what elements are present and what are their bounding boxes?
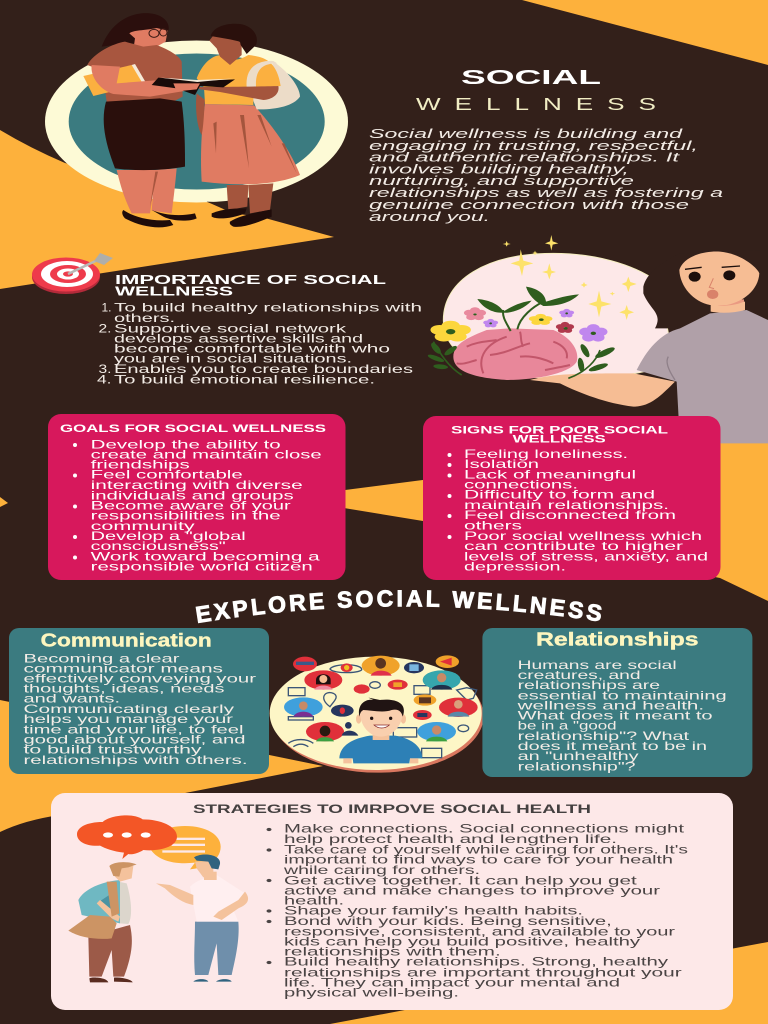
bullet list: signs: Feeling loneliness. [464,447,628,461]
intro paragraph [369,127,723,224]
intro paragraph: nurturing, and supportive [369,174,634,188]
numbered list: importance: To build healthy relationships with [114,301,422,315]
bullet list: signs: levels of stress, anxiety, and [464,549,708,563]
bullet list: signs: Poor social wellness which [464,529,702,543]
text: relationships body: relationships are [518,678,661,692]
bullet list: strategies: Get active together. It can help you get [284,873,638,887]
numbered list: importance: Supportive social network [114,321,348,335]
text: relationships body: creatures, and [518,668,641,682]
heading: importance of social wellness [115,273,387,299]
heading: communication: Communication [41,631,212,651]
bullet list: goals: Develop a "global [91,529,246,543]
bullet list: strategies: health. [284,893,344,907]
text: relationships body: an "unhealthy [518,749,639,763]
bullet list: strategies: while caring for others. [282,863,480,877]
intro paragraph: around you. [369,210,490,224]
bullet list: signs: can contribute to higher [464,539,683,553]
numbered list: importance: 4. [97,372,112,386]
text: communication body [24,651,256,767]
bullet list: strategies: active and make changes to improve your [284,883,660,897]
heading: signs: WELLNESS [513,434,606,446]
text: communication body: good about yourself, and [24,733,246,747]
bullet list: strategies: important to find ways to care for your health [284,853,673,867]
bullet list: strategies [266,822,688,1000]
numbered list: importance: To build emotional resilience. [114,372,375,386]
numbered list: importance: 3. [98,362,112,376]
bullet list: goals: Become aware of your [91,499,291,513]
text: relationships body: be in a "good [518,719,617,733]
bullet list: goals: Work toward becoming a [91,550,320,564]
text: communication body: time and your life, to feel [24,722,244,736]
bullet list: goals [73,437,322,574]
bullet list: strategies: Make connections. Social connections might [284,822,685,836]
bullet list: signs: Lack of meaningful [464,467,636,481]
intro paragraph: involves building healthy, [369,162,629,176]
title: WELLNESS [416,94,656,114]
heading: explore social wellness (curved): EXPLORE SOCIAL WELLNESS [196,590,602,624]
bullet list: strategies: Build healthy relationships. Strong, healthy [284,955,668,969]
intro paragraph: genuine connection with those [369,198,689,212]
intro paragraph: relationships as well as fostering a [369,186,723,200]
panel: goals for social wellness [48,414,346,580]
panel: signs for poor social wellness [423,416,720,580]
bullet list: strategies: responsive, consistent, and available to your [284,924,675,938]
numbered list: importance: others. [114,311,175,325]
numbered list: importance [97,301,422,386]
bullet list: signs: connections. [464,478,578,492]
bullet list: goals: create and maintain close [91,447,322,461]
bullet list: signs: Feel disconnected from [464,508,676,522]
numbered list: importance: Enables you to create boundaries [114,362,413,376]
bullet list: strategies: Bond with your kids. Being sensitive, [284,914,612,928]
intro paragraph: Social wellness is building and [369,127,684,141]
bullet list: goals: Develop the ability to [91,437,281,451]
heading: importance of social wellness: WELLNESS [115,285,233,299]
numbered list: importance: become comfortable with who [114,342,391,356]
numbered list: importance: 2. [98,321,112,335]
bullet list: strategies: Take care of yourself while caring for others. It's [284,842,688,856]
title: SOCIAL [461,67,601,89]
text: relationships body: does it meant to be in [518,739,707,753]
illustration: two women reading a book [45,13,348,227]
illustration: two people talking with speech bubbles [68,815,248,982]
bullet list: goals: individuals and groups [91,488,294,502]
bullet list: goals: consciousness" [91,539,226,553]
bullet list: strategies: life. They can impact your mental and [284,976,620,990]
heading: relationships: Relationships [536,630,698,650]
intro paragraph: engaging in trusting, respectful, [369,139,698,153]
intro paragraph: and authentic relationships. It [369,150,680,164]
text: communication body: to build trustworthy [24,743,202,757]
text: communication body: and wants. [24,692,120,706]
text: relationships body: essential to maintaining [518,688,727,702]
heading: strategies: STRATEGIES TO IMRPOVE SOCIAL HEALTH [193,802,591,816]
text: communication body: thoughts, ideas, needs [24,682,224,696]
bullet list: signs: Difficulty to form and [464,488,655,502]
bullet list: strategies: relationships are important throughout your [284,965,682,979]
bullet list: goals: interacting with diverse [91,478,303,492]
illustration: woman holding brain with flowers [427,235,768,443]
text: communication body: helps you manage your [24,712,233,726]
bullet list: goals: responsible world citizen [91,560,313,574]
text: relationships body [516,658,727,773]
numbered list: importance: develops assertive skills and [114,332,363,346]
bullet list: signs: others [464,518,522,532]
bullet list: strategies: kids can help you build positive, healthy [284,934,640,948]
bullet list: signs: Isolation [464,457,539,471]
text: relationships body: Humans are social [518,658,677,672]
bullet list: strategies: relationships with them. [284,945,501,959]
bullet list: strategies: physical well-being. [284,986,459,1000]
text: communication body: relationships with others. [24,753,248,767]
heading: goals: GOALS FOR SOCIAL WELLNESS [60,423,326,435]
numbered list: importance: 1. [102,301,112,315]
bullet list: signs: depression. [464,559,566,573]
panel: communication [9,628,269,774]
text: communication body: Becoming a clear [24,651,180,665]
bullet list: strategies: help protect health and lengthen life. [284,832,617,846]
text: communication body: communicator means [24,661,223,675]
numbered list: importance: you are in social situations. [114,352,352,366]
text: relationships body: relationship"? What [518,729,690,743]
text: communication body: Communicating clearly [24,702,234,716]
heading: signs [451,424,668,446]
panel: relationships [482,628,752,777]
heading: signs: SIGNS FOR POOR SOCIAL [451,424,668,436]
heading: importance of social wellness: IMPORTANCE OF SOCIAL [115,273,387,287]
bullet list: signs: maintain relationships. [464,498,669,512]
panel: strategies to improve social health [51,793,733,1010]
icon: target with arrow [32,253,113,294]
text: relationships body: What does it meant to [518,709,713,723]
text: communication body: effectively conveying your [24,672,256,686]
bullet list: goals: responsibilities in the [91,509,281,523]
bullet list: goals: Feel comfortable [91,468,243,482]
title [416,67,656,114]
bullet list: goals: friendships [91,457,190,471]
bullet list: strategies: Shape your family's health habits. [284,904,583,918]
text: relationships body: wellness and health. [516,698,704,712]
bullet list: signs [448,447,708,573]
bullet list: goals: community [91,519,195,533]
text: relationships body: relationship"? [518,759,636,773]
illustration: social network circle with people [270,655,484,773]
